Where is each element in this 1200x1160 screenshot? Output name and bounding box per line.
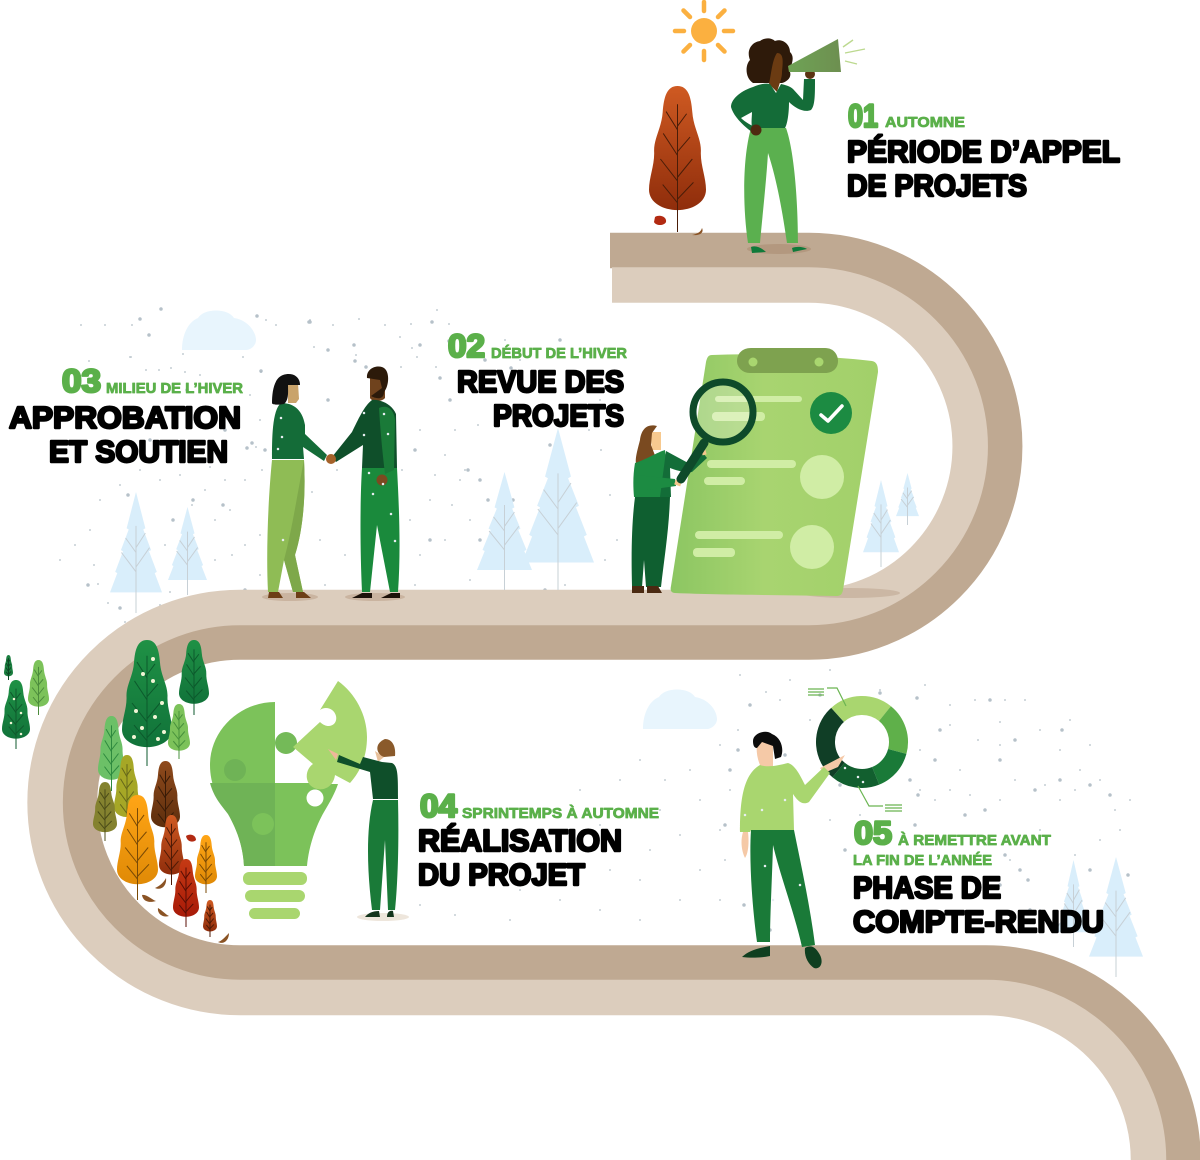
figures: handshake <box>262 366 405 601</box>
road: winding two-tone path <box>45 250 1183 1160</box>
step 05 label: LA FIN DE L’ANNÉE <box>853 852 992 869</box>
step 03 label: MILIEU DE L’HIVER <box>106 380 243 397</box>
step 03 label: 03 <box>62 363 101 399</box>
step 01 label: PÉRIODE D’APPEL <box>847 134 1120 169</box>
figure: woman with megaphone <box>731 38 865 254</box>
step 02 label: PROJETS <box>493 398 624 433</box>
step 01 label: DE PROJETS <box>847 168 1027 203</box>
step 02 label <box>448 328 627 433</box>
icon: clouds <box>182 310 717 729</box>
donut chart <box>808 688 914 811</box>
step 02 label: REVUE DES <box>457 364 624 399</box>
step 05 label: COMPTE-RENDU <box>853 904 1104 939</box>
step 02 label: DÉBUT DE L’HIVER <box>491 345 627 362</box>
step 03 label: APPROBATION <box>9 400 241 435</box>
foreground snow on figures <box>278 413 863 900</box>
step 04 label: 04 <box>420 788 457 824</box>
step 01 label: AUTOMNE <box>885 114 965 131</box>
step 01 label: 01 <box>848 98 878 134</box>
figure: man presenting chart <box>740 732 845 968</box>
tree: autumn rust tree <box>649 86 706 235</box>
step 03 label: ET SOUTIEN <box>49 434 228 469</box>
step 03 label <box>9 363 243 469</box>
icon: sun <box>675 2 733 60</box>
figure: woman with magnifying glass <box>632 425 707 593</box>
background snow dots <box>60 309 1130 930</box>
clipboard <box>671 348 900 598</box>
trees: spring and autumn grove <box>2 640 229 943</box>
step 05 label: 05 <box>854 815 892 851</box>
step 04 label: DU PROJET <box>418 857 585 892</box>
step 05 label <box>853 815 1104 939</box>
step 01 label <box>847 98 1120 203</box>
step 05 label: À REMETTRE AVANT <box>898 832 1051 849</box>
figure: person placing puzzle piece <box>328 739 409 921</box>
step 02 label: 02 <box>448 328 485 364</box>
step 04 label <box>418 788 659 892</box>
step 05 label: PHASE DE <box>853 870 1001 905</box>
step 04 label: RÉALISATION <box>418 823 622 858</box>
icon: lightbulb puzzle <box>210 681 367 919</box>
step 04 label: SPRINTEMPS À AUTOMNE <box>462 805 659 822</box>
winter firs <box>110 428 1143 977</box>
icon: magnifying glass <box>681 382 753 479</box>
